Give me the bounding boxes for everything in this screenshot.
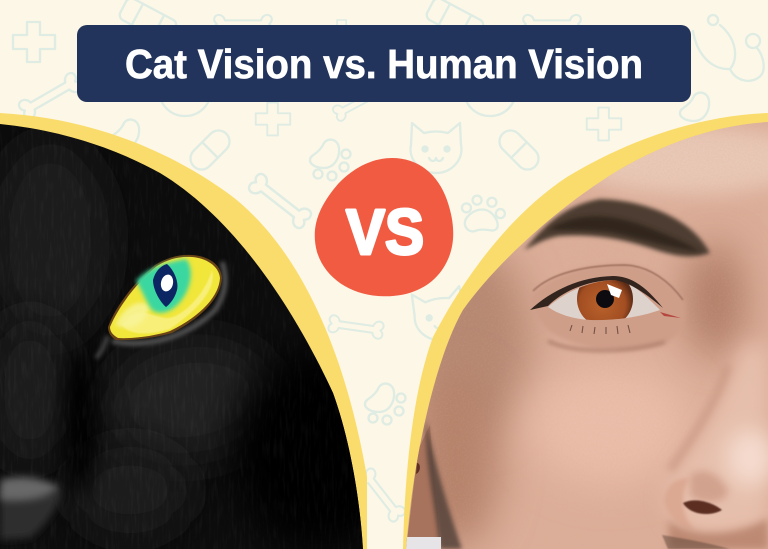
grey fur rim under eye	[112, 262, 225, 343]
yellow arc: cat side	[0, 113, 367, 549]
title banner	[77, 25, 691, 102]
cat nose	[0, 477, 62, 540]
panel: human photo with yellow border	[400, 110, 768, 549]
human eye	[530, 271, 681, 334]
title text: Cat Vision vs. Human Vision	[125, 41, 643, 87]
upper eyelid and under-eye area	[530, 264, 685, 351]
vs text: VS	[346, 196, 424, 268]
panel: cat photo with yellow border	[0, 113, 367, 549]
yellow arc: human side	[403, 113, 768, 549]
eyebrow	[524, 199, 710, 256]
human photo	[400, 110, 768, 549]
cat eye	[108, 255, 222, 340]
vs badge	[315, 158, 453, 296]
beard, ear and collar	[405, 420, 462, 549]
nose	[662, 345, 768, 549]
eyelashes	[530, 276, 663, 310]
cat photo	[0, 124, 363, 549]
